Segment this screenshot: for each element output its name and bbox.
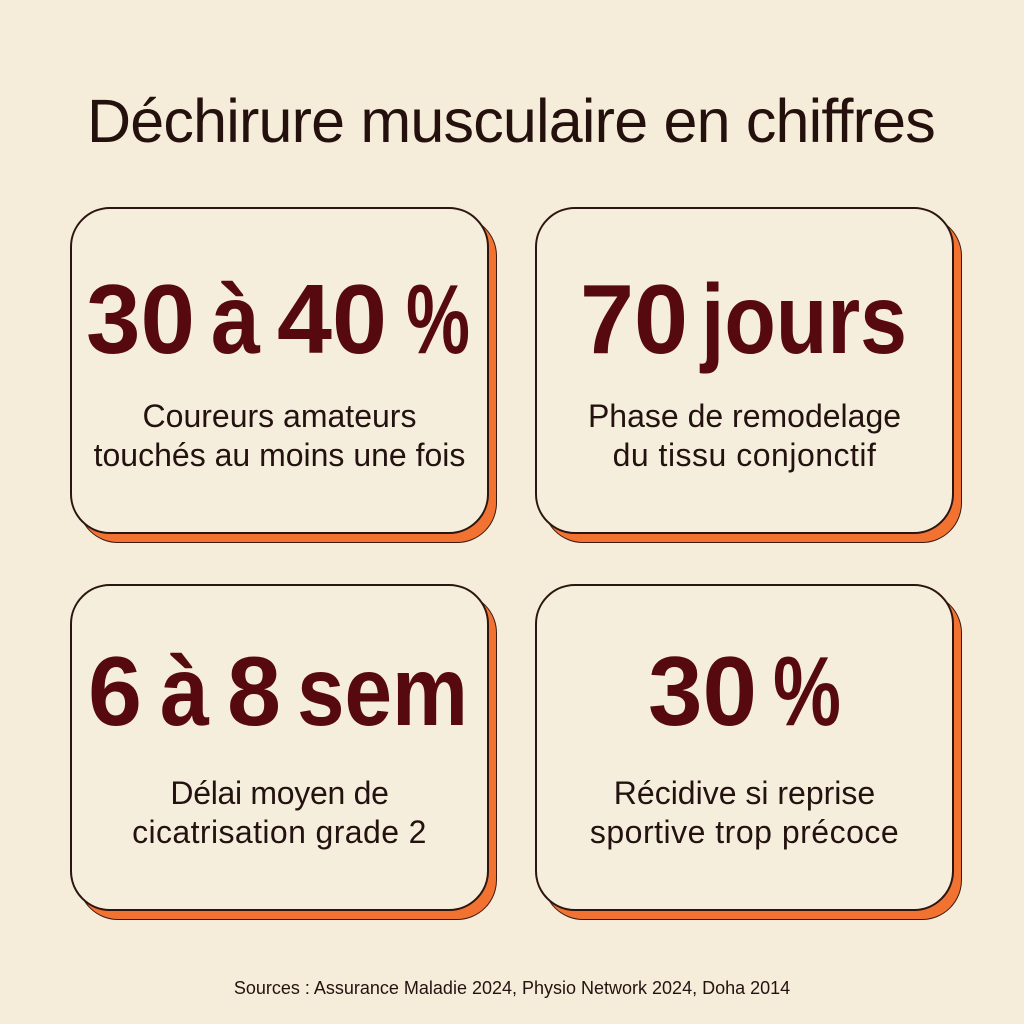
description: récidive: sportive trop précoce bbox=[590, 814, 899, 850]
description: coureurs amateurs bbox=[94, 398, 465, 473]
statistic: 6 à 8 sem: 6 bbox=[88, 636, 142, 746]
description: remodelage bbox=[588, 398, 901, 473]
description: cicatrisation bbox=[132, 775, 427, 850]
statistic: 70 jours bbox=[580, 264, 907, 374]
statistic: 30 à 40 %: % bbox=[406, 264, 470, 374]
description: coureurs amateurs: Coureurs amateurs bbox=[143, 398, 416, 434]
statistic: 30 % bbox=[648, 636, 841, 746]
description: récidive: Récidive si reprise bbox=[614, 775, 875, 811]
statistic: 6 à 8 sem: 8 bbox=[227, 636, 281, 746]
statistic: 70 jours: 70 bbox=[580, 264, 688, 374]
statistic: 6 à 8 sem: à bbox=[160, 636, 209, 746]
statistic: 70 jours: jours bbox=[699, 264, 907, 374]
description: récidive bbox=[590, 775, 899, 850]
description: remodelage: du tissu conjonctif bbox=[613, 437, 876, 473]
statistic: 30 à 40 % bbox=[86, 264, 470, 374]
description: cicatrisation: Délai moyen de bbox=[170, 775, 389, 811]
sources footer: Sources : Assurance Maladie 2024, Physio Network 2024, Doha 2014 bbox=[234, 978, 790, 998]
description: remodelage: Phase de remodelage bbox=[588, 398, 901, 434]
statistic: 6 à 8 sem bbox=[88, 636, 468, 746]
panel: remodelage bbox=[535, 207, 962, 543]
statistic: 30 à 40 %: à bbox=[211, 264, 260, 374]
statistic: 30 à 40 %: 40 bbox=[277, 264, 387, 374]
statistic: 6 à 8 sem: sem bbox=[297, 636, 468, 746]
panel: récidive bbox=[535, 584, 962, 920]
description: coureurs amateurs: touchés au moins une fois bbox=[94, 437, 465, 473]
statistic: 30 à 40 %: 30 bbox=[86, 264, 195, 374]
panel: coureurs amateurs bbox=[70, 207, 497, 543]
statistic: 30 %: % bbox=[773, 636, 841, 746]
description: cicatrisation: cicatrisation grade 2 bbox=[132, 814, 427, 850]
panel: cicatrisation bbox=[70, 584, 497, 920]
title: Déchirure musculaire en chiffres bbox=[87, 87, 935, 155]
statistic: 30 %: 30 bbox=[648, 636, 757, 746]
